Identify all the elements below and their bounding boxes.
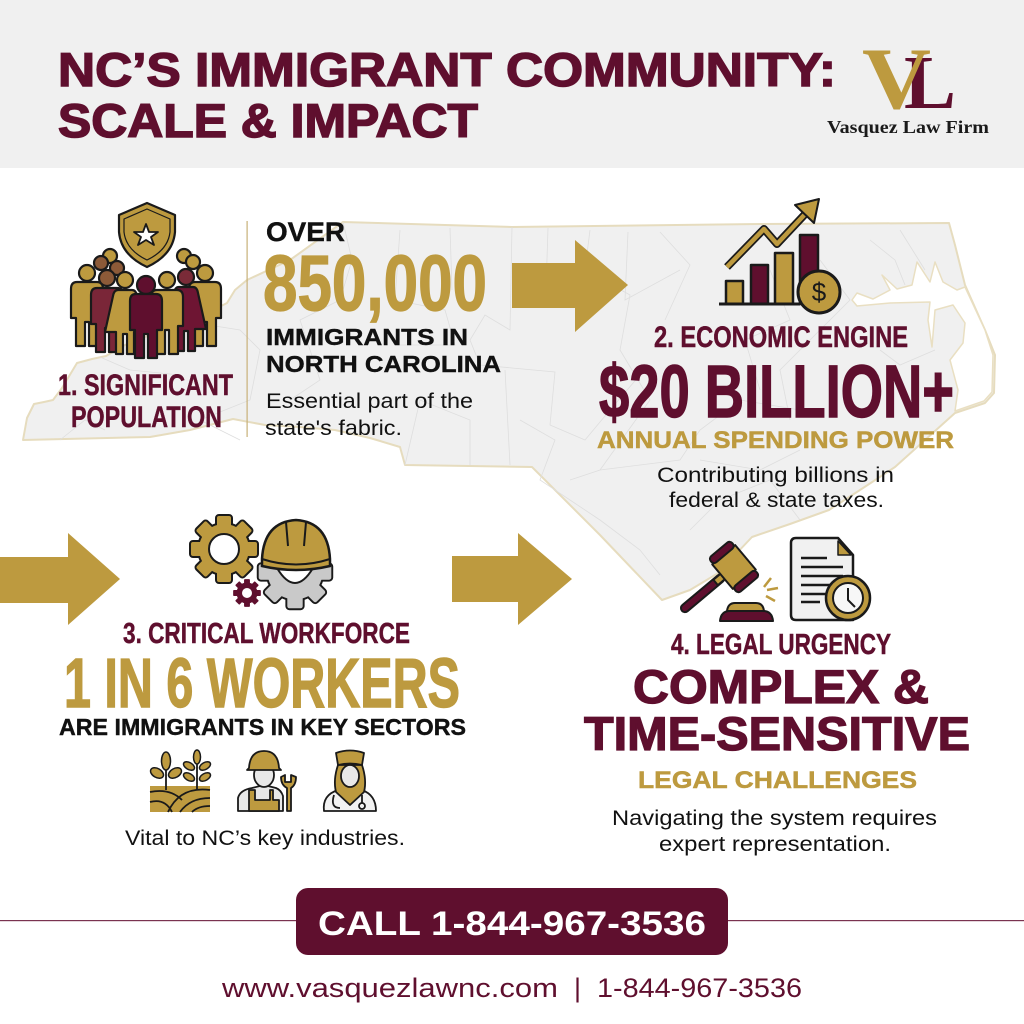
text: contributing billions: federal & state taxes. — [669, 489, 884, 512]
stat: 850,000: 850,000 — [263, 238, 487, 327]
text: immigrants in north carolina: NORTH CAROLINA — [266, 351, 501, 377]
panel: critical workforce — [59, 516, 466, 850]
stat: complex & time-sensitive: TIME-SENSITIVE — [584, 707, 970, 760]
footer contact line: 1-844-967-3536 — [597, 973, 802, 1003]
text: navigating the system: Navigating the system requires — [612, 807, 937, 830]
footer contact line: www.vasquezlawnc.com — [221, 973, 558, 1003]
panel: significant population — [58, 203, 233, 434]
text: navigating the system — [612, 807, 937, 856]
icon: rising bar chart with coin — [719, 199, 840, 313]
heading: 2. economic engine: 2. ECONOMIC ENGINE — [654, 321, 908, 354]
logo: Vasquez Law Firm: L — [904, 41, 956, 125]
icon: nurse — [324, 750, 376, 811]
heading: 1. significant population: 1. SIGNIFICANT — [58, 369, 233, 402]
divider — [246, 221, 248, 437]
title: SCALE & IMPACT — [58, 94, 478, 147]
stat: complex & time-sensitive — [584, 660, 970, 760]
label: are immigrants in key sectors: ARE IMMIGRANTS IN KEY SECTORS — [59, 714, 466, 740]
text: immigrants in north carolina — [266, 324, 501, 377]
icon: gavel — [667, 540, 778, 628]
label: annual spending power: ANNUAL SPENDING POWER — [597, 427, 954, 454]
icon: farm — [149, 750, 212, 812]
footer contact line — [221, 973, 802, 1003]
map of North Carolina — [23, 222, 995, 600]
text: essential part: state's fabric. — [265, 417, 402, 440]
label: over: OVER — [266, 217, 345, 247]
icon: rising bar chart with coin: $ — [812, 277, 827, 307]
icon: construction worker — [238, 751, 296, 811]
heading: 1. significant population: POPULATION — [71, 401, 222, 434]
logo: Vasquez Law Firm — [827, 31, 989, 137]
header band — [0, 0, 1024, 168]
text: contributing billions — [657, 464, 894, 512]
stat: 1 in 6 workers: 1 IN 6 WORKERS — [64, 644, 460, 722]
footer contact line: | — [574, 973, 581, 1003]
call button: CALL 1-844-967-3536 — [318, 905, 706, 943]
panel: economic engine — [597, 199, 954, 512]
panel: legal urgency — [584, 538, 970, 856]
heading: 3. critical workforce: 3. CRITICAL WORKFORCE — [123, 618, 410, 650]
arrow: section 1 to section 2 — [512, 240, 628, 332]
logo: Vasquez Law Firm: Vasquez Law Firm — [827, 117, 989, 137]
panel: 850,000 immigrants stat — [263, 217, 501, 440]
icon: gears and hard hat — [191, 516, 331, 608]
arrow: section 3 to section 4 — [452, 533, 572, 625]
title: NC’S IMMIGRANT COMMUNITY: — [58, 43, 836, 96]
label: legal challenges: LEGAL CHALLENGES — [638, 767, 917, 794]
footer rule — [0, 920, 1024, 921]
arrow: left to section 3 — [0, 533, 120, 625]
text: navigating the system: expert representation. — [659, 833, 891, 856]
text: immigrants in north carolina: IMMIGRANTS IN — [266, 324, 468, 350]
text: essential part — [265, 390, 473, 440]
logo: Vasquez Law Firm: V — [862, 31, 931, 128]
heading: 4. legal urgency: 4. LEGAL URGENCY — [671, 629, 891, 661]
sounds and inlets — [852, 262, 993, 411]
heading: 1. significant population — [58, 369, 233, 434]
county lines — [60, 222, 935, 575]
icon: people group with shield — [71, 203, 221, 358]
text: contributing billions: Contributing billions in — [657, 464, 894, 487]
text: essential part: Essential part of the — [266, 390, 473, 413]
stat: complex & time-sensitive: COMPLEX & — [633, 660, 929, 713]
title — [58, 43, 836, 147]
call button — [296, 888, 728, 955]
icon: document with clock — [791, 538, 870, 620]
text: vital to key industries: Vital to NC’s key industries. — [125, 827, 405, 850]
